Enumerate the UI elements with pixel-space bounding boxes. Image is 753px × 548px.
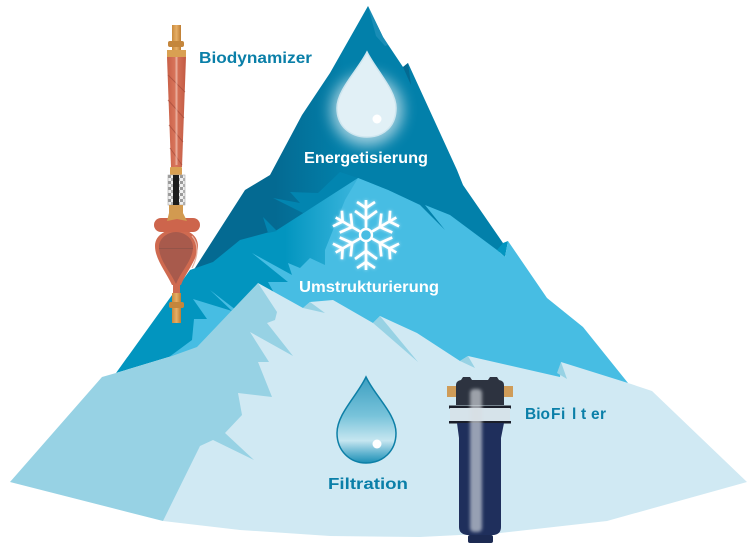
lower left jagged spikes — [165, 288, 260, 360]
top brass nozzle — [172, 25, 181, 50]
mountain notch upper right — [403, 63, 411, 85]
label: Biodynamizer: Biodynamizer — [199, 50, 312, 67]
icon: glowing water drop — [331, 52, 403, 146]
heading: Energetisierung: Energetisierung — [304, 150, 428, 167]
heading: Filtration: Filtration — [328, 476, 408, 493]
icon: water drop — [337, 377, 396, 463]
label: BioFilter: e — [591, 406, 600, 423]
checkered coupling — [168, 175, 185, 205]
mountain summit facet — [368, 6, 388, 46]
mountain: pale foreground layer — [10, 283, 747, 537]
filter band — [449, 406, 511, 408]
filter base — [468, 535, 493, 543]
label: BioFilter: r — [600, 406, 606, 423]
brass ports — [447, 386, 457, 397]
flask bulb — [155, 229, 198, 285]
heading: Umstrukturierung: Umstrukturierung — [299, 279, 439, 296]
brass joint — [170, 167, 182, 175]
mountain jagged medium band — [273, 172, 358, 213]
label: BioFilter: l — [572, 406, 576, 423]
mountain: light blue layer — [165, 178, 628, 400]
copper tube — [167, 57, 186, 167]
filter body — [457, 423, 504, 535]
label: BioFilter: Bio — [525, 406, 550, 423]
foreground left shaded face — [10, 283, 293, 521]
copper cap — [154, 218, 200, 232]
shaded ridge spikes — [303, 302, 567, 379]
mountain: middle layer — [116, 178, 508, 373]
label: BioFilter: F — [551, 406, 560, 423]
filter head — [456, 377, 504, 405]
device: BioFilter housing — [447, 377, 513, 543]
small jag on dark band — [263, 217, 277, 233]
lower brass nozzle — [173, 284, 180, 293]
lower brass joint — [167, 205, 187, 221]
filter highlight — [470, 389, 482, 532]
mountain: upper dark layer — [150, 6, 503, 330]
notch on right edge — [497, 241, 508, 257]
icon: snowflake — [330, 200, 402, 270]
copper spiral — [168, 75, 185, 165]
label: BioFilter: t — [581, 406, 586, 423]
label: BioFilter: i — [561, 406, 565, 423]
tube highlight — [176, 57, 178, 165]
device: Biodynamizer — [154, 25, 200, 323]
